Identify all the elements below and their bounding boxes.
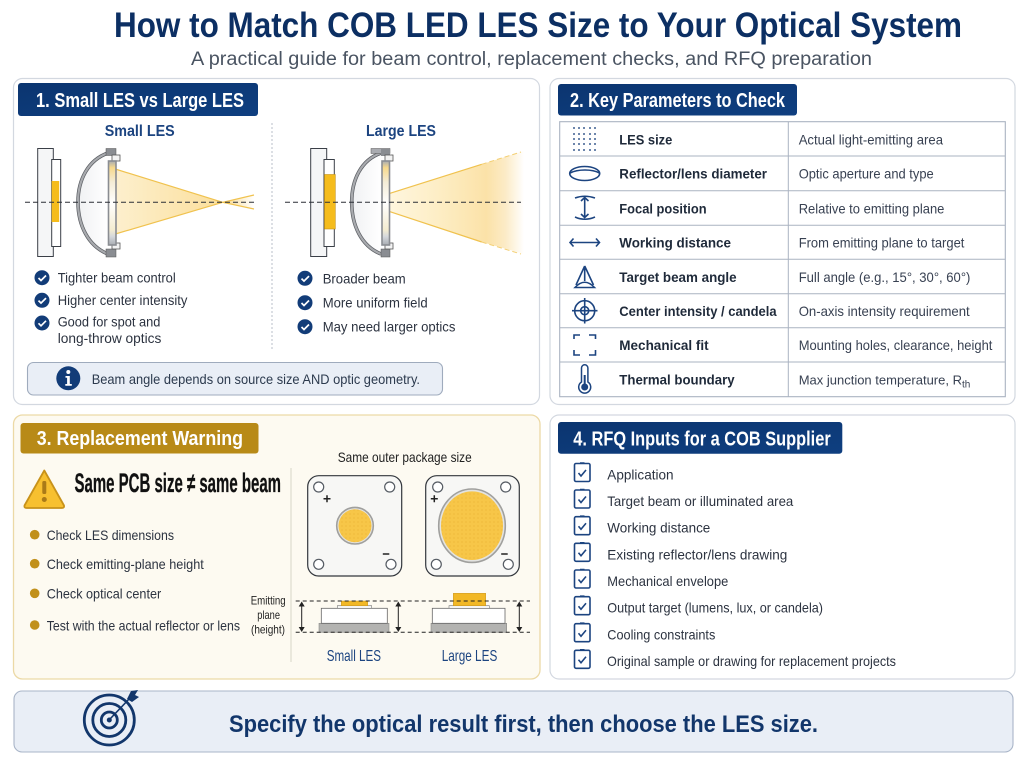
replacement checklist: Test with the actual reflector or lens [47,617,240,633]
parameters table: Optic aperture and type [799,166,934,182]
RFQ checklist: Target beam or illuminated area [607,493,793,509]
heading: small vs large [18,83,258,116]
RFQ checklist: Application [607,466,674,482]
heading: replacement warning: 3. Replacement Warning [37,428,243,450]
warning headline: Same PCB size ≠ same beam [74,468,281,498]
parameters table: On-axis intensity requirement [799,303,970,319]
small LES benefits list: long-throw optics [58,330,161,346]
package size caption: Same outer package size [338,449,472,465]
replacement checklist: Check LES dimensions [47,527,174,543]
diagram: large LES optics [311,148,524,257]
large LES benefits list [298,270,455,335]
parameters table: Full angle (e.g., 15°, 30°, 60°) [799,269,970,285]
icon: LES size [573,127,596,151]
small LES benefits list: Good for spot and [58,314,160,330]
side view: large LES [431,593,507,632]
icon: focal position [575,196,595,219]
parameters table: Relative to emitting plane [799,200,945,216]
parameters table: Thermal boundary [619,371,735,387]
icon: thermometer [579,365,591,393]
parameters table: Target beam angle [619,269,737,285]
RFQ checklist: Mechanical envelope [607,573,728,589]
RFQ checklist: Working distance [607,520,710,536]
icon: reflector lens [570,166,600,180]
subtitle: A practical guide for beam control, replacement checks, and RFQ preparation [191,49,872,70]
icon: mechanical fit [574,335,596,355]
heading: replacement warning [20,423,258,454]
replacement checklist [30,527,240,633]
emitting plane label [251,594,286,636]
parameters table: Actual light-emitting area [799,131,943,147]
small LES caption: Small LES [327,648,381,665]
icon: info [56,366,80,390]
heading: small vs large: 1. Small LES vs Large LES [36,90,244,112]
parameters table: From emitting plane to target [799,235,964,251]
small LES benefits list: Higher center intensity [58,292,187,308]
replacement checklist: Check emitting-plane height [47,556,204,572]
panel: small vs large LES [14,78,540,404]
large LES benefits list: May need larger optics [323,319,455,335]
parameters table: Mounting holes, clearance, height [799,337,993,353]
parameters table [560,122,1005,397]
small LES benefits list: Tighter beam control [58,270,176,286]
parameters table: Mechanical fit [619,337,709,353]
panel: replacement warning [14,415,540,679]
COB package: small LES [308,476,402,576]
emitting plane label: Emitting [251,594,286,608]
parameters table: Working distance [619,235,731,251]
small LES benefits list [34,270,187,346]
RFQ checklist: Output target (lumens, lux, or candela) [607,600,823,616]
RFQ checklist: Original sample or drawing for replacement projects [607,653,896,669]
emitting plane label: (height) [251,622,285,636]
heading: key parameters: 2. Key Parameters to Check [570,90,786,112]
replacement checklist: Check optical center [47,586,162,602]
parameters table: Center intensity / candela [619,303,777,319]
side view: small LES [319,601,389,632]
panel: key parameters [550,78,1015,404]
COB package: large LES [426,476,519,576]
banner: key takeaway [14,690,1013,752]
large LES caption: Large LES [442,648,497,665]
icon: warning triangle [24,470,64,508]
RFQ checklist [574,463,896,669]
heading: RFQ inputs: 4. RFQ Inputs for a COB Supplier [573,428,831,450]
icon: working distance [570,238,600,246]
heading: key parameters [558,84,797,116]
parameters table: th [962,379,970,390]
icon: beam angle [575,266,594,288]
callout: beam angle note: Beam angle depends on source size AND optic geometry. [92,371,420,387]
parameters table: Max junction temperature, R [799,372,962,387]
diagram: small LES optics [38,148,254,257]
parameters table: Focal position [619,200,707,216]
parameters table: LES size [619,131,672,147]
height dimension lines and arrows [296,601,530,632]
RFQ checklist: Existing reflector/lens drawing [607,547,787,563]
icon: target with arrow [84,690,139,745]
large LES benefits list: More uniform field [323,295,428,311]
icon: center intensity [572,298,598,324]
parameters table: Reflector/lens diameter [619,166,768,182]
panel: RFQ inputs [550,415,1015,679]
heading: RFQ inputs [558,422,842,454]
large LES benefits list: Broader beam [323,270,406,286]
takeaway text: Specify the optical result first, then choose the LES size. [229,711,818,738]
RFQ checklist: Cooling constraints [607,626,715,642]
emitting plane label: plane [257,608,280,622]
large LES label: Large LES [366,123,436,140]
callout: beam angle note [28,362,442,395]
small LES label: Small LES [105,123,175,140]
